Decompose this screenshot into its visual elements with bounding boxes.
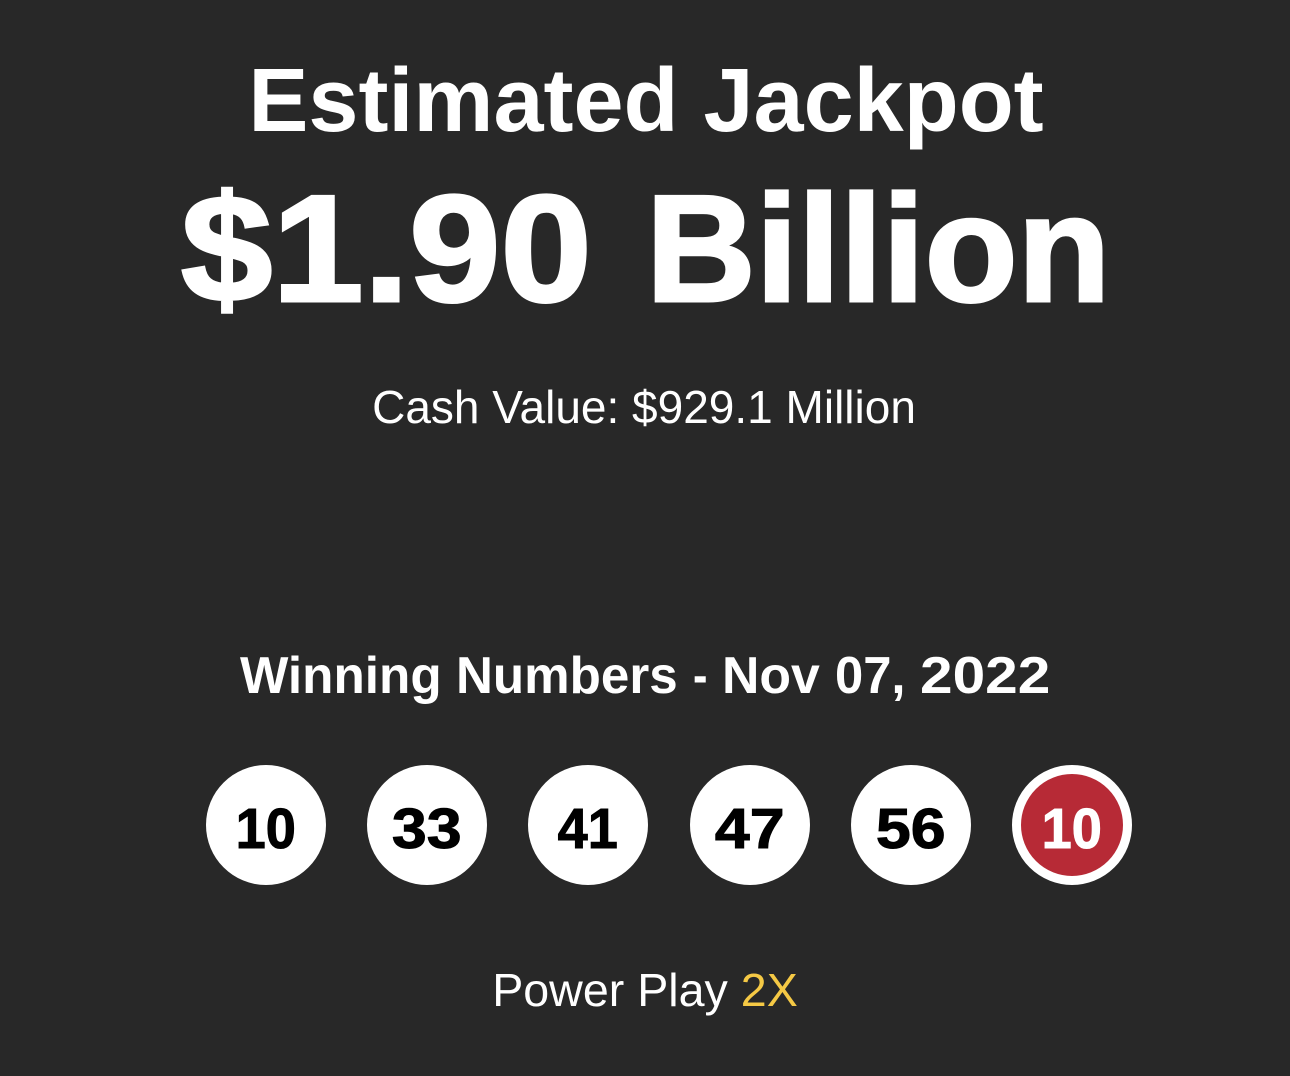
heading: winning numbers: Winning: [240, 647, 442, 705]
ball 47: 47: [715, 797, 785, 861]
ball 33: [367, 765, 487, 885]
power play: Power Play 2X: [492, 964, 798, 1016]
powerball 10: [1012, 765, 1132, 885]
cash value: Cash Value: $929.1 Million: [372, 381, 916, 433]
title: Estimated Jackpot: Estimated Jackpot: [248, 51, 1044, 151]
heading: winning numbers: Nov: [722, 647, 820, 705]
ball 33: 33: [392, 797, 462, 861]
jackpot amount: [181, 164, 1110, 334]
heading: winning numbers: 2022: [920, 647, 1050, 705]
jackpot amount: $1.90: [181, 164, 592, 334]
powerball 10: 10: [1042, 797, 1102, 861]
heading: winning numbers: 07,: [835, 647, 906, 705]
ball 10: [206, 765, 326, 885]
ball 10: 10: [236, 797, 296, 861]
ball 41: [528, 765, 648, 885]
winning number balls: [206, 765, 1132, 885]
ball 56: 56: [876, 797, 946, 861]
heading: winning numbers: Numbers: [456, 647, 678, 705]
heading: winning numbers: -: [693, 647, 707, 705]
ball 47: [690, 765, 810, 885]
jackpot amount: Billion: [646, 164, 1110, 334]
ball 56: [851, 765, 971, 885]
heading: winning numbers: [240, 647, 1050, 705]
ball 41: 41: [558, 797, 618, 861]
